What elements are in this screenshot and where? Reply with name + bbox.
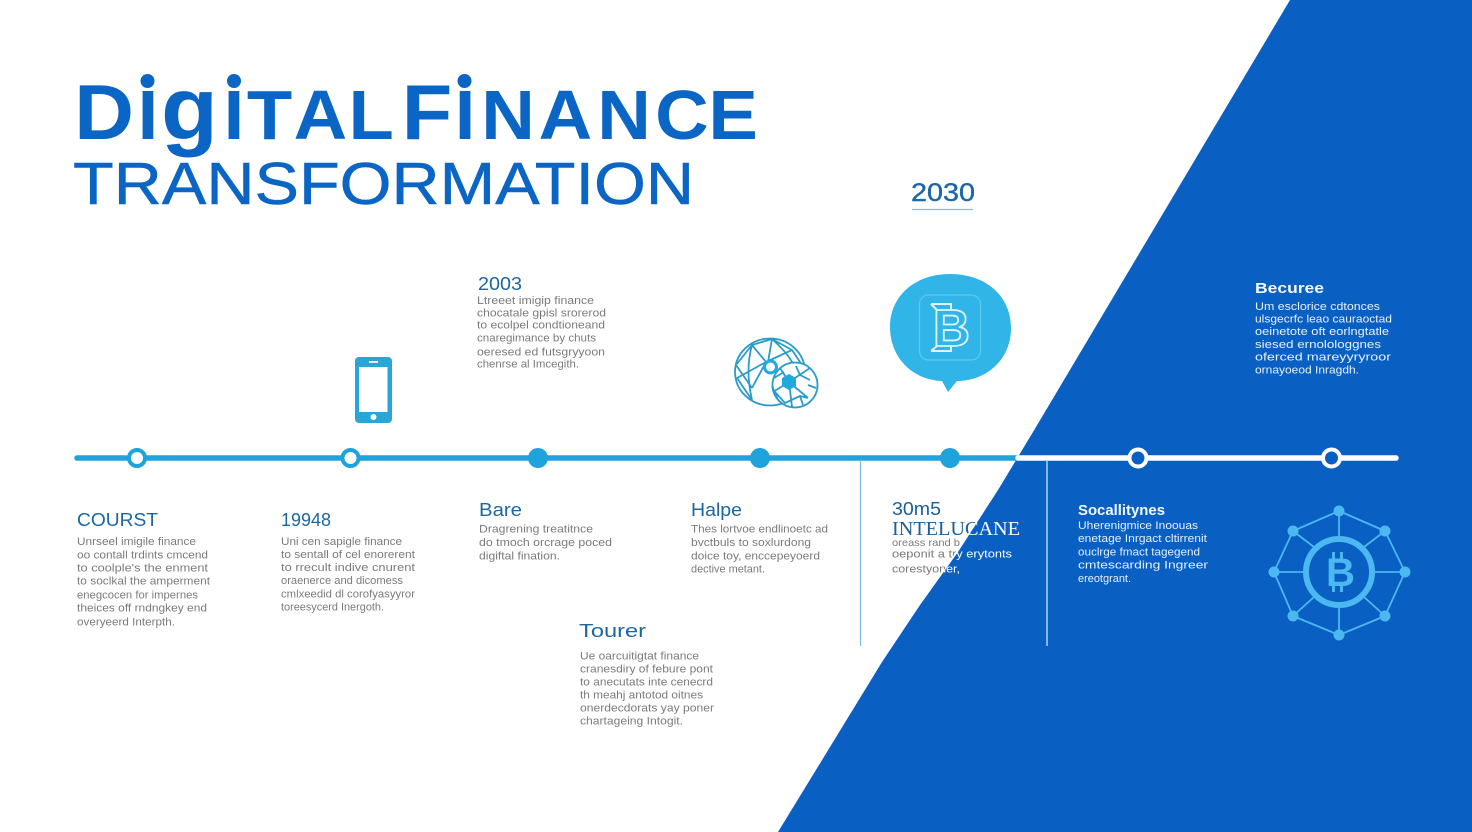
block: Courst: [77, 510, 210, 628]
block: Courst: Unrseel imigile finance: [77, 536, 196, 548]
block: Halpe: Halpe: [691, 500, 742, 520]
block: Halpe: bvctbuls to soxlurdong: [691, 537, 811, 549]
block: 30m5 Intelucane: 30m5: [892, 499, 941, 519]
block: 2003: to ecolpel condtioneand: [477, 320, 605, 332]
block: Halpe: [691, 500, 828, 576]
block: Courst: overyeerd Interpth.: [77, 616, 175, 628]
icon: bitcoin network: [1268, 506, 1410, 640]
block: Socallitynes: [1078, 502, 1208, 585]
block: Courst: to coolple's the enment: [77, 562, 208, 574]
block: 19948: to rrecult indive cnurent: [281, 562, 415, 574]
block: Bare: do tmoch orcrage poced: [479, 537, 612, 549]
block: Halpe: dective metant.: [691, 564, 765, 576]
block: Courst: enegcocen for impernes: [77, 590, 199, 602]
icon: globes network: [735, 338, 818, 408]
block: 19948: Uni cen sapigle finance: [281, 536, 402, 548]
icon: smartphone: [355, 357, 392, 423]
icon: bitcoin speech bubble: B: [933, 300, 970, 358]
block: Courst: to soclkal the amperment: [77, 576, 210, 588]
block: 2003: oeresed ed futsgryyoon: [477, 346, 605, 358]
blue diagonal background panel: [778, 0, 1472, 832]
block: 19948: to sentall of cel enorerent: [281, 549, 415, 561]
block: Tourer: Ue oarcuitigtat finance: [580, 650, 699, 662]
block: Socallitynes: Uherenigmice Inoouas: [1078, 520, 1199, 532]
block: Courst: COURST: [77, 510, 158, 530]
year label: 2030: 2030: [911, 179, 975, 207]
block: 19948: 19948: [281, 510, 331, 530]
block: Halpe: doice toy, enccepeyoerd: [691, 550, 820, 562]
block: Courst: oo contall trdints cmcend: [77, 550, 208, 562]
block: Socallitynes: Socallitynes: [1078, 502, 1165, 519]
block: Socallitynes: enetage Inrgact cltirrenit: [1078, 533, 1207, 545]
block: 2003: chocatale gpisl srorerod: [477, 308, 606, 320]
block: Tourer: Tourer: [579, 621, 646, 641]
block: Bare: digiftal fination.: [479, 550, 560, 562]
block: 2003: cnaregimance by chuts: [477, 332, 597, 344]
title: DIgITAL FINANCE: [74, 60, 758, 158]
block: 30m5 Intelucane: corestyoner,: [892, 564, 960, 576]
block: Becuree: [1255, 280, 1392, 376]
icon: bitcoin network: B: [1326, 551, 1355, 595]
block: Courst: theices off rndngkey end: [77, 602, 207, 614]
block: 19948: [281, 510, 415, 614]
block: Tourer: onerdecdorats yay poner: [580, 702, 714, 714]
block: Becuree: siesed ernolologgnes: [1255, 339, 1382, 351]
block: Becuree: ornayoeod Inragdh.: [1255, 364, 1359, 376]
block: Becuree: Um esclorice cdtonces: [1255, 301, 1381, 313]
block: 30m5 Intelucane: [892, 499, 1020, 576]
icon: bitcoin speech bubble: [890, 274, 1011, 392]
block: Socallitynes: ouclrge fmact tagegend: [1078, 546, 1200, 558]
title: TRANSFORMATION: [73, 151, 694, 217]
block: Becuree: oeinetote oft eorlngtatle: [1255, 326, 1389, 338]
block: 19948: toreesycerd Inergoth.: [281, 602, 384, 614]
block: Halpe: Thes lortvoe endlinoetc ad: [691, 524, 828, 536]
block: 30m5 Intelucane: oreass rand b: [892, 537, 960, 549]
timeline: [77, 448, 1396, 468]
block: 2003: 2003: [478, 274, 522, 294]
block: Tourer: chartageing Intogit.: [580, 716, 683, 728]
block: Becuree: oferced mareyyryroor: [1255, 352, 1391, 364]
block: Tourer: [579, 621, 714, 728]
block: Bare: Dragrening treatitnce: [479, 524, 593, 536]
block: Bare: Bare: [479, 500, 522, 520]
block: 2003: Ltreeet imigip finance: [477, 295, 594, 307]
block: Socallitynes: cmtescarding Ingreer: [1078, 560, 1208, 572]
block: Socallitynes: ereotgrant.: [1078, 573, 1131, 585]
vertical connector lines: [860, 460, 1047, 646]
title: [73, 60, 758, 217]
block: 19948: cmlxeedid dl corofyasyyror: [281, 588, 415, 600]
block: 2003: chenrse al Imcegith.: [477, 358, 579, 370]
block: Tourer: to anecutats inte cenecrd: [580, 676, 713, 688]
block: 30m5 Intelucane: INTELUCANE: [892, 518, 1020, 540]
block: Tourer: th meahj antotod oitnes: [580, 690, 704, 702]
block: Bare: [479, 500, 612, 562]
block: Tourer: cranesdiry of febure pont: [580, 664, 713, 676]
block: Becuree: ulsgecrfc leao cauraoctad: [1255, 314, 1392, 326]
block: 19948: oraenerce and dicomess: [281, 575, 403, 587]
block: 2003: [477, 274, 606, 370]
block: 30m5 Intelucane: oeponit a try erytonts: [892, 548, 1013, 560]
block: Becuree: Becuree: [1255, 280, 1324, 297]
